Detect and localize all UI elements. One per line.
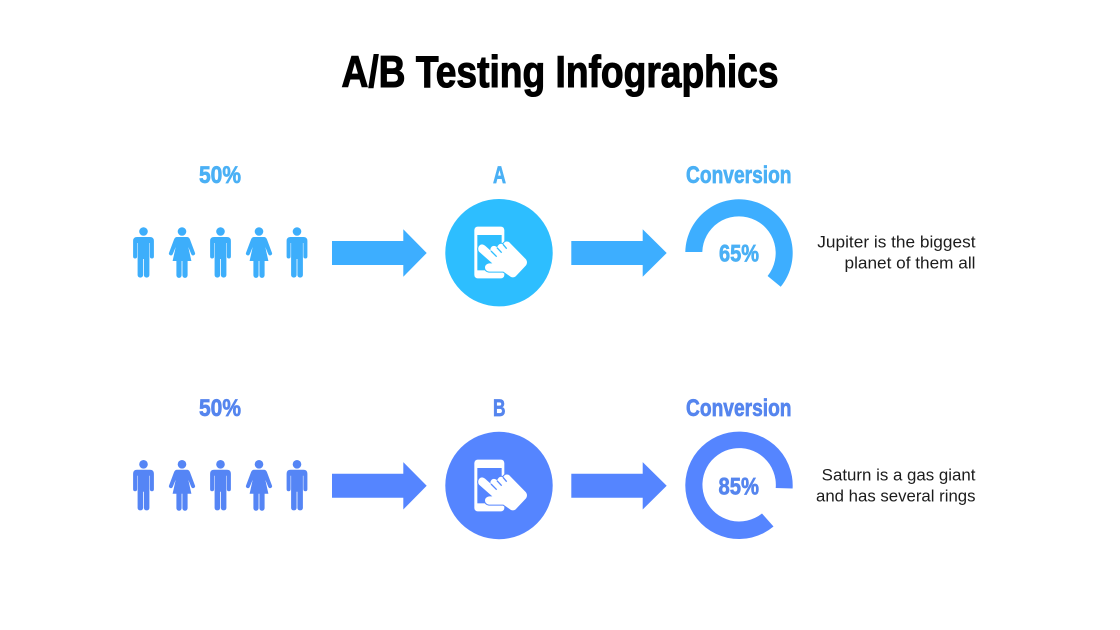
arrow: people to B (332, 462, 427, 510)
people group A (133, 227, 307, 278)
label: B: B (493, 395, 506, 422)
heading: Conversion B: Conversion (686, 395, 792, 422)
heading: 50% A: 50% (199, 162, 241, 189)
people group B (133, 460, 307, 511)
description B (816, 466, 976, 505)
row A (133, 162, 976, 306)
title: A/B Testing Infographics (342, 48, 778, 97)
description A (817, 232, 976, 272)
description B: Saturn is a gas giant (822, 466, 976, 484)
icon: phone tap B (445, 432, 553, 539)
description B: and has several rings (816, 486, 976, 505)
arrow: people to A (332, 229, 427, 277)
value: 85%: 85% (718, 473, 759, 500)
arrow: A to conversion (571, 229, 667, 277)
chart: 85% ring (685, 432, 793, 539)
icon: phone tap A (445, 199, 553, 306)
description A: planet of them all (844, 253, 976, 272)
value: 65%: 65% (719, 241, 759, 268)
chart: 65% ring (685, 199, 793, 287)
description A: Jupiter is the biggest (817, 232, 976, 251)
heading: 50% B: 50% (199, 395, 241, 422)
arrow: B to conversion (571, 462, 667, 510)
label: A: A (493, 162, 506, 189)
heading: Conversion A: Conversion (686, 162, 792, 189)
row B (133, 395, 976, 539)
